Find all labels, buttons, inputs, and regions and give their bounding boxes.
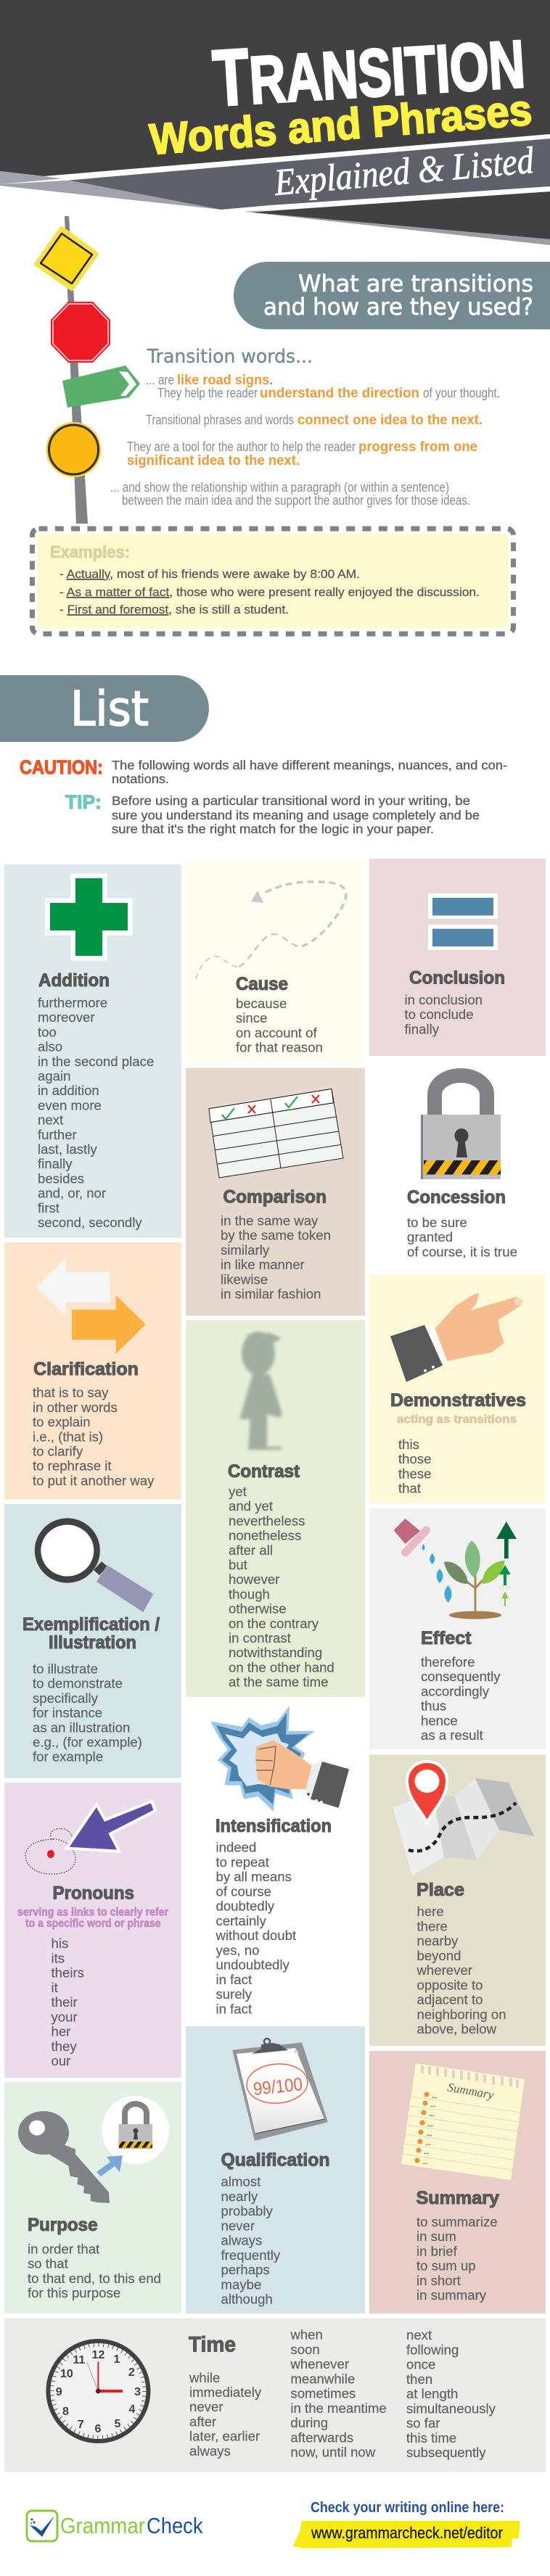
word list: here — [416, 1904, 444, 1919]
road sign post illustration — [36, 216, 140, 524]
text block: transition words explanation: ... are — [146, 373, 174, 387]
heading pill: list: List — [70, 681, 149, 737]
tip note: sure you understand its meaning and usage completely and be — [112, 808, 480, 822]
icon: summary note: ... — [430, 2101, 436, 2108]
word list: again — [38, 1068, 71, 1083]
word list: these — [398, 1466, 431, 1481]
word list: further — [38, 1127, 77, 1142]
word list: of course — [216, 1883, 271, 1899]
icon: summary note: ... — [429, 2110, 435, 2118]
panel: exemplification / illustration: Illustration — [49, 1632, 136, 1653]
icon: key and lock — [18, 2096, 169, 2203]
icon: summary note: ... — [427, 2121, 433, 2128]
examples box: - First and foremost , she is still a student. — [59, 603, 289, 616]
word list: above, below — [416, 2021, 497, 2036]
icon: clock: 6 — [95, 2423, 102, 2435]
panel: conclusion — [369, 859, 546, 1056]
text block: transition words explanation: between the main idea and the support the author gives for those ideas. — [122, 493, 470, 508]
word list: after all — [229, 1543, 273, 1558]
word list: column 3: next — [406, 2327, 432, 2342]
heading pill: what are transitions: and how are they used? — [263, 293, 533, 321]
word list: column 2: during — [290, 2415, 328, 2430]
word list: column 2: whenever — [290, 2356, 349, 2371]
icon: clock: 7 — [78, 2419, 84, 2431]
word list: e.g., (for example) — [33, 1735, 142, 1749]
word list: accordingly — [421, 1683, 490, 1698]
panel: purpose — [4, 2082, 181, 2313]
panel: time — [4, 2318, 546, 2472]
word list: in order that — [28, 2241, 100, 2256]
icon: clock: 10 — [60, 2368, 73, 2380]
tip note: Before using a particular transitional word in your writing, be — [112, 793, 470, 808]
caution note: CAUTION: — [20, 756, 103, 778]
word list: column 1: always — [189, 2443, 231, 2459]
word list: opposite to — [416, 1977, 483, 1992]
word list: to put it another way — [33, 1473, 155, 1488]
word list: likewise — [221, 1271, 268, 1287]
word list: nevertheless — [229, 1513, 305, 1528]
panel: cause — [186, 859, 365, 1063]
text block: transition words explanation: Transitional phrases and words — [146, 413, 294, 427]
icon: summary note: ... — [427, 2130, 432, 2137]
icon: summary note: ... — [424, 2148, 430, 2155]
word list: this — [398, 1437, 419, 1452]
text block: transition words explanation: They are a tool for the author to help the reader — [127, 439, 356, 454]
panel: comparison — [186, 1068, 365, 1316]
icon: green arrow sign — [62, 366, 140, 408]
word list: therefore — [421, 1654, 475, 1669]
word list: to that end, to this end — [28, 2271, 161, 2286]
word list: nonetheless — [229, 1528, 301, 1543]
icon: opposite arrows — [37, 1258, 146, 1354]
icon: plus — [46, 874, 132, 960]
subheading: acting as transitions — [397, 1413, 517, 1426]
word list: in sum — [416, 2229, 456, 2244]
word list: frequently — [221, 2247, 281, 2263]
word list: on the other hand — [229, 1659, 334, 1675]
word list: for instance — [33, 1705, 102, 1720]
word list: thus — [421, 1698, 446, 1714]
icon: summary note: ... — [422, 2158, 428, 2166]
icon: clock: 4 — [128, 2403, 135, 2416]
word list: column 1: never — [189, 2399, 223, 2414]
icon: comparison table — [209, 1089, 343, 1178]
word list: first — [38, 1200, 60, 1215]
word list: to demonstrate — [33, 1676, 123, 1691]
caution note — [20, 756, 507, 786]
word list: column 2: in the meantime — [290, 2400, 387, 2416]
word list: even more — [38, 1097, 102, 1112]
heading: Clarification — [33, 1359, 139, 1379]
word list: always — [221, 2233, 262, 2248]
word list: and yet — [229, 1498, 274, 1514]
icon: round yellow sign — [46, 423, 100, 476]
word list: in fact — [216, 2001, 253, 2016]
word list: in fact — [216, 1972, 253, 1987]
tip note: sure that it's the right match for the logic in your paper. — [112, 822, 434, 836]
word list: perhaps — [221, 2262, 270, 2277]
word list: their — [51, 1994, 78, 2010]
word list: column 2: soon — [290, 2342, 320, 2357]
text block: transition words explanation: like road signs. — [177, 373, 273, 388]
icon: clock: 3 — [134, 2386, 141, 2398]
word list: yes, no — [216, 1942, 259, 1957]
word list: however — [229, 1572, 279, 1587]
score text: 99/100 — [253, 2074, 303, 2100]
heading: Conclusion — [409, 967, 505, 988]
panel: qualification — [186, 2026, 365, 2313]
word list: indeed — [216, 1839, 256, 1855]
word list: by the same token — [221, 1228, 331, 1243]
word list: to illustrate — [33, 1661, 98, 1677]
word list: never — [221, 2218, 255, 2233]
word list: furthermore — [38, 995, 107, 1010]
icon: clock: 1 — [114, 2353, 120, 2366]
word list: of course, it is true — [407, 1244, 517, 1259]
word list: moreover — [38, 1010, 95, 1025]
word list: column 3: subsequently — [406, 2445, 486, 2460]
word list: yet — [229, 1484, 247, 1499]
word list: column 1: while — [189, 2370, 220, 2385]
logo: GrammarCheck: Grammar — [60, 2513, 145, 2538]
word list: surely — [216, 1986, 253, 2002]
word list: beyond — [416, 1948, 461, 1963]
heading pill: what are transitions — [234, 262, 550, 329]
word list: in summary — [416, 2287, 487, 2303]
word list: column 2: when — [290, 2327, 323, 2342]
text block: transition words explanation — [110, 346, 500, 508]
icon: pointing hand — [390, 1293, 522, 1382]
panel: contrast — [186, 1320, 365, 1697]
panel: place — [369, 1755, 546, 2046]
word list: its — [51, 1950, 65, 1965]
word list: finally — [405, 1021, 440, 1036]
subheading: serving as links to clearly refer — [17, 1906, 168, 1919]
heading: Demonstratives — [390, 1390, 526, 1411]
icon: clock: 12 — [92, 2349, 104, 2361]
call to action: Check your writing online here: — [311, 2500, 504, 2516]
icon: clock: 11 — [73, 2354, 85, 2366]
word list: column 2: afterwards — [290, 2430, 353, 2445]
word list: column 1: after — [189, 2414, 216, 2429]
call to action: www.grammarcheck.net/editor — [311, 2524, 503, 2542]
icon: clock — [48, 2341, 148, 2441]
word list: certainly — [216, 1913, 266, 1928]
word list: column 3: this time — [406, 2430, 456, 2445]
word list: but — [229, 1557, 248, 1572]
heading: Summary — [416, 2188, 499, 2208]
panel: intensification — [210, 1706, 349, 2016]
panel: effect — [369, 1508, 546, 1749]
subtitle: Words and Phrases: Words and Phrases — [148, 86, 533, 164]
word list: granted — [407, 1229, 453, 1244]
word list: for this purpose — [28, 2285, 120, 2300]
text block: transition words explanation: understand the direction — [260, 386, 419, 401]
word list: and, or, nor — [38, 1186, 106, 1201]
panel: pronouns: to a specific word or phrase — [25, 1917, 161, 1930]
tip note — [65, 791, 480, 836]
word list: to be sure — [407, 1215, 467, 1230]
word list: second, secondly — [38, 1215, 142, 1230]
word list: those — [398, 1451, 431, 1466]
word list: column 3: once — [406, 2357, 435, 2371]
word list: i.e., (that is) — [33, 1429, 103, 1444]
heading: Addition — [38, 970, 110, 991]
word list: our — [51, 2053, 70, 2068]
heading: Qualification — [221, 2150, 329, 2170]
word list: to summarize — [416, 2214, 498, 2229]
word list: without doubt — [215, 1928, 297, 1943]
word list: in contrast — [229, 1630, 292, 1646]
word list: column 2: sometimes — [290, 2386, 356, 2400]
word list: in the second place — [38, 1054, 154, 1069]
word list: specifically — [33, 1690, 99, 1706]
word list: column 2: meanwhile — [290, 2371, 355, 2386]
text block: transition words explanation: of your thought. — [423, 386, 500, 400]
icon: clock: 9 — [56, 2386, 62, 2398]
word list: it — [51, 1980, 59, 1995]
panel: clarification — [4, 1242, 181, 1500]
icon: summary note — [401, 2063, 525, 2180]
word list: in similar fashion — [221, 1287, 321, 1301]
heading: examples: Examples: — [50, 542, 130, 561]
word list: in conclusion — [405, 992, 483, 1007]
word list: also — [38, 1039, 62, 1054]
word list: theirs — [51, 1965, 84, 1980]
icon: equals sign — [428, 893, 498, 950]
word list: to clarify — [33, 1443, 83, 1459]
icon: clipboard with score — [234, 2039, 327, 2139]
examples box: - Actually, most of his friends were awake by 8:00 AM. — [59, 568, 360, 581]
caution note: notations. — [112, 772, 169, 786]
word list: as a result — [421, 1727, 484, 1743]
word list: in like manner — [221, 1257, 305, 1272]
word list: in the same way — [221, 1213, 319, 1229]
icon: yellow diamond sign — [36, 228, 97, 289]
word list: there — [416, 1918, 448, 1933]
heading: Purpose — [28, 2215, 98, 2235]
heading: Concession — [407, 1187, 506, 1208]
word list: in brief — [416, 2243, 458, 2258]
word list: doubtedly — [216, 1899, 275, 1914]
word list: so that — [28, 2256, 69, 2271]
word list: last, lastly — [38, 1142, 97, 1157]
panel: exemplification / illustration — [4, 1504, 181, 1778]
tip note: TIP: — [65, 791, 102, 813]
icon: clock: 2 — [128, 2366, 135, 2379]
word list: to conclude — [405, 1007, 474, 1022]
word list: wherever — [416, 1962, 472, 1978]
script label: Summary — [446, 2080, 495, 2102]
word list: in short — [416, 2273, 461, 2288]
heading: Contrast — [228, 1461, 300, 1482]
heading: Pronouns — [52, 1883, 134, 1903]
heading: Exemplification / — [22, 1614, 160, 1635]
word list: on the contrary — [229, 1616, 319, 1631]
word list: that is to say — [33, 1385, 109, 1400]
word list: for that reason — [236, 1040, 323, 1055]
word list: to explain — [33, 1414, 91, 1429]
icon: clock: 8 — [62, 2406, 69, 2418]
word list: similarly — [221, 1242, 270, 1258]
word list: to sum up — [416, 2258, 476, 2274]
word list: his — [51, 1936, 68, 1951]
word list: column 2: now, until now — [290, 2444, 376, 2460]
text block: transition words explanation: progress from one — [358, 439, 477, 455]
text block: transition words explanation: ... and show the relationship within a paragraph (or within a sentence) — [110, 480, 449, 495]
word list: that — [398, 1481, 422, 1496]
icon: dashed path arrow — [196, 882, 346, 979]
icon: map with pin — [393, 1762, 534, 1875]
heading: Cause — [236, 974, 288, 994]
word list: because — [236, 996, 287, 1011]
word list: her — [51, 2023, 70, 2039]
word list: since — [236, 1010, 267, 1025]
word list: maybe — [221, 2276, 261, 2292]
word list: on account of — [236, 1025, 317, 1040]
icon: red stop sign — [51, 302, 110, 363]
heading: Intensification — [216, 1816, 332, 1836]
panel: summary — [369, 2051, 546, 2313]
icon: shadow figure — [239, 1332, 282, 1450]
word list: column 3: so far — [406, 2415, 440, 2431]
examples box: - As a matter of fact , those who were present really enjoyed the discussion. — [59, 586, 480, 599]
heading: Comparison — [223, 1186, 327, 1207]
word list: neighboring on — [416, 2007, 506, 2022]
word list: column 3: simultaneously — [406, 2400, 496, 2416]
icon: summary note: ... — [425, 2139, 431, 2147]
call to action — [293, 2500, 520, 2548]
word list: column 3: at length — [406, 2386, 458, 2401]
icon: summary note: ... — [432, 2092, 438, 2100]
word list: to rephrase it — [33, 1458, 112, 1474]
text block: transition words explanation: connect one idea to the next. — [297, 413, 483, 428]
word list: column 3: then — [406, 2371, 432, 2387]
word list: in addition — [38, 1083, 99, 1098]
word list: nearby — [416, 1933, 459, 1948]
heading: Transition words: Transition words... — [147, 346, 313, 368]
word list: column 1: later, earlier — [189, 2429, 260, 2444]
heading: Time — [189, 2332, 236, 2356]
word list: at the same time — [229, 1675, 328, 1690]
text block: transition words explanation: They help the reader — [157, 386, 258, 400]
word list: by all means — [216, 1869, 292, 1884]
icon: fist punching through — [210, 1706, 349, 1812]
word list: to repeat — [216, 1854, 270, 1870]
panel: pronouns — [4, 1783, 181, 2078]
logo: GrammarCheck — [27, 2511, 203, 2541]
word list: adjacent to — [416, 1991, 483, 2007]
word list: too — [38, 1024, 57, 1039]
word list: though — [229, 1586, 270, 1601]
word list: besides — [38, 1171, 84, 1186]
heading: Effect — [421, 1628, 472, 1648]
word list: undoubtedly — [216, 1957, 290, 1973]
word list: otherwise — [229, 1601, 287, 1617]
heading pill: what are transitions: What are transitions — [298, 270, 533, 297]
word list: as an illustration — [33, 1720, 130, 1735]
word list: finally — [38, 1156, 73, 1171]
icon: padlock — [421, 1076, 501, 1179]
icon: magnifying glass — [35, 1518, 153, 1612]
word list: your — [51, 2009, 78, 2024]
word list: consequently — [421, 1669, 501, 1684]
word list: notwithstanding — [229, 1645, 322, 1660]
word list: in other words — [33, 1400, 118, 1415]
word list: hence — [421, 1713, 458, 1728]
word list: they — [51, 2039, 77, 2054]
panel: concession — [407, 1076, 517, 1259]
word list: probably — [221, 2203, 274, 2218]
panel: demonstratives — [369, 1275, 546, 1503]
word list: column 3: following — [406, 2342, 459, 2357]
icon: watering plant — [393, 1519, 517, 1619]
word list: nearly — [221, 2189, 258, 2204]
caution note: The following words all have different meanings, nuances, and con- — [112, 758, 507, 772]
examples box — [32, 529, 514, 634]
icon: clock: 5 — [115, 2418, 121, 2430]
text block: transition words explanation: significant idea to the next. — [127, 453, 300, 468]
logo: GrammarCheck: Check — [147, 2513, 203, 2538]
header banner — [0, 0, 550, 245]
word list: although — [221, 2292, 273, 2307]
heading pill: list — [0, 675, 209, 742]
word list: for example — [33, 1749, 103, 1764]
word list: column 1: immediately — [189, 2385, 262, 2400]
word list: almost — [221, 2174, 261, 2189]
panel: addition — [4, 864, 181, 1238]
icon: arrow pointing at dot — [25, 1801, 155, 1874]
word list: next — [38, 1112, 64, 1128]
heading: Place — [416, 1880, 464, 1900]
